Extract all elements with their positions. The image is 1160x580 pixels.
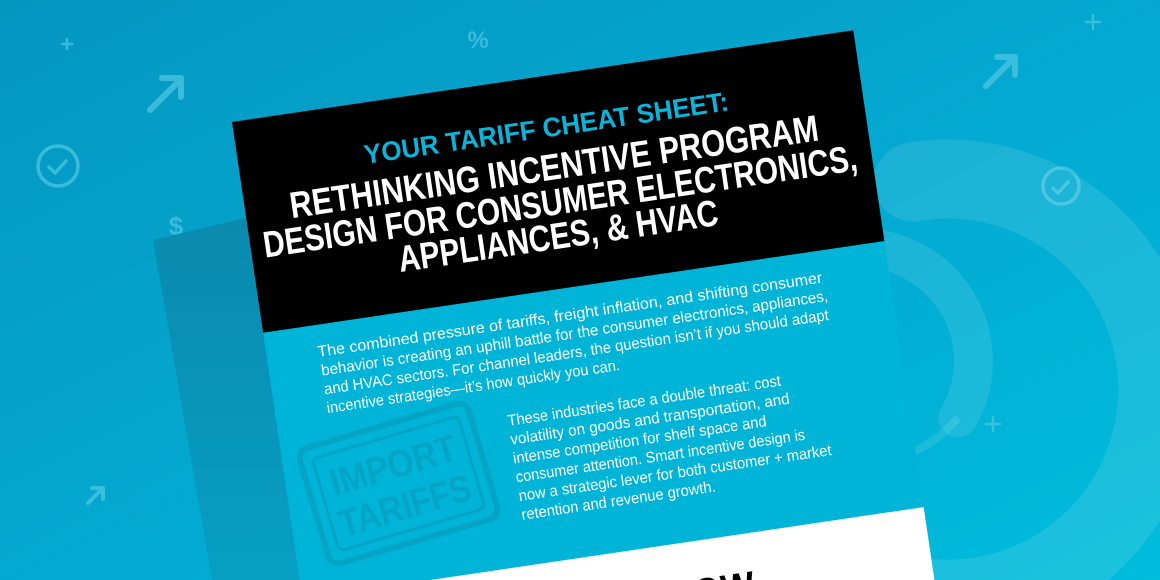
- icon: plus signs: [62, 15, 1100, 431]
- panel: header: [232, 30, 885, 334]
- text block: intro paragraph: incentive strategies—it’s how quickly you can.: [326, 357, 621, 417]
- subtitle: YOUR TARIFF CHEAT SHEET:: [362, 86, 730, 170]
- text block: intro paragraph: behavior is creating an uphill battle for the consumer electronics, appliances,: [320, 288, 829, 380]
- text block: second paragraph: intense competition for shelf space and: [512, 413, 768, 467]
- title: APPLIANCES, & HVAC: [395, 192, 721, 280]
- gauge rings: [850, 179, 1158, 580]
- text block: second paragraph: retention and revenue growth.: [520, 478, 717, 524]
- back page shadow: [153, 218, 300, 580]
- text block: second paragraph: now a strategic lever for both customer + market: [518, 442, 833, 505]
- text block: intro paragraph: [316, 269, 835, 417]
- title: RETHINKING INCENTIVE PROGRAM: [287, 108, 821, 226]
- icon: dollar: $: [169, 211, 184, 241]
- outer arc: [850, 179, 1158, 580]
- icon: arrow up-right right: [986, 57, 1015, 86]
- document: [232, 30, 941, 580]
- icon: arrow up-right left: [150, 78, 181, 110]
- inner arc: [860, 248, 973, 418]
- text block: second paragraph: [506, 367, 836, 524]
- icon: check circle left: [38, 146, 78, 186]
- text block: intro paragraph: The combined pressure of tariffs, freight inflation, and shifting consumer: [316, 270, 823, 361]
- text block: intro paragraph: and HVAC sectors. For channel leaders, the question isn’t if you should adapt: [323, 307, 831, 398]
- panel: body: [263, 241, 924, 580]
- text block: second paragraph: These industries face a double threat: cost: [506, 373, 783, 430]
- stamp: import tariffs: IMPORT: [325, 428, 462, 505]
- decorative icons: [38, 15, 1100, 503]
- title: DESIGN FOR CONSUMER ELECTRONICS,: [260, 137, 860, 266]
- stamp: import tariffs: TARIFFS: [334, 467, 477, 546]
- needle: [905, 418, 958, 455]
- text block: second paragraph: volatility on goods and transportation, and: [509, 391, 791, 449]
- stamp: import tariffs: [297, 401, 500, 566]
- text block: second paragraph: consumer attention. Smart incentive design is: [515, 427, 806, 486]
- icon: small arrow bottom left: [88, 488, 103, 503]
- icon: percent: %: [467, 27, 489, 54]
- panel: white section: [430, 507, 934, 580]
- icon: check circle right: [1043, 168, 1079, 204]
